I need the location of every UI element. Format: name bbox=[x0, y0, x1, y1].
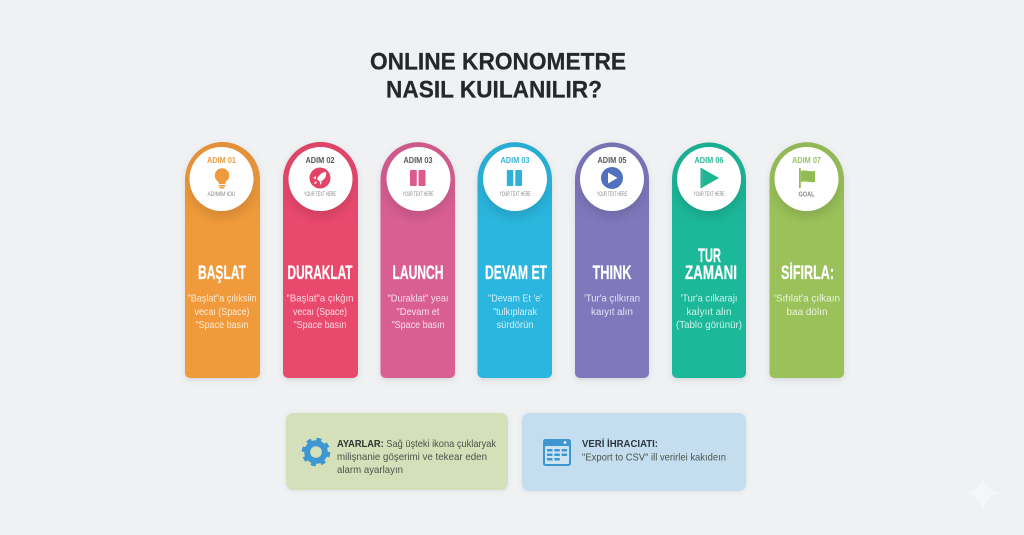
panel: step 6 Tur Zamanı bbox=[672, 142, 746, 378]
panel: step 4 Devam Et: DEVAM ET bbox=[485, 262, 547, 284]
panel: data export note: "Export to CSV" ill verirlei kakıdeın bbox=[582, 452, 726, 464]
panel: step 1 Başlat: BAŞLAT bbox=[198, 262, 246, 284]
panel: step 3 Launch: "Space basın bbox=[392, 319, 445, 331]
panel: step 1 Başlat: ADIMIM IOU bbox=[208, 192, 236, 198]
panel: step 4 Devam Et: sürdörün bbox=[496, 319, 534, 331]
title: ONLINE KRONOMETRE bbox=[370, 48, 626, 76]
panel: step 5 Think: ADIM 05 bbox=[598, 156, 627, 165]
panel: step 6 Tur Zamanı: YOUR TEXT HERE bbox=[694, 192, 724, 198]
panel: step 4 Devam Et: ADIM 03 bbox=[500, 156, 530, 165]
panel: step 4 Devam Et bbox=[478, 142, 552, 378]
icon: pause bbox=[410, 170, 426, 186]
panel: settings note: alarm ayarlayın bbox=[337, 464, 403, 476]
panel: data export note: VERİ İHRACIATI: bbox=[582, 437, 658, 450]
icon: light bulb bbox=[215, 168, 229, 188]
title: NASIL KUILANILIR? bbox=[386, 76, 602, 104]
panel: step 7 Sıfırla bbox=[770, 142, 844, 378]
panel: step 2 Duraklat: "Space basın bbox=[294, 319, 347, 331]
panel: step 7 Sıfırla: GOAL bbox=[798, 192, 815, 198]
panel: step 6 Tur Zamanı: TUR bbox=[698, 245, 721, 267]
panel: step 1 Başlat: "Başlat"a çılıksiin bbox=[188, 292, 257, 304]
panel: step 3 Launch: "Duraklat" yeaı bbox=[388, 292, 448, 304]
panel: step 6 Tur Zamanı: ZAMANI bbox=[685, 262, 737, 284]
panel: step 4 Devam Et: YOUR TEXT HERE bbox=[500, 192, 530, 198]
panel: step 2 Duraklat bbox=[283, 142, 358, 378]
panel: step 2 Duraklat: vecaı (Space) bbox=[293, 306, 347, 318]
panel: step 6 Tur Zamanı: 'Tur'a cılkarajı bbox=[680, 292, 738, 304]
panel: step 7 Sıfırla: SİFIRLA: bbox=[781, 261, 834, 284]
panel: settings note: AYARLAR: Sağ üşteki ikona çuklaryak bbox=[337, 438, 497, 450]
panel: step 3 Launch: YOUR TEXT HERE bbox=[402, 192, 434, 198]
panel: step 5 Think: THINK bbox=[592, 262, 632, 284]
icon: calendar table bbox=[543, 439, 571, 466]
panel: step 5 Think: YOUR TEXT HERE bbox=[597, 192, 627, 198]
icon: gear bbox=[304, 440, 328, 464]
panel: step 7 Sıfırla: ADIM 07 bbox=[792, 156, 822, 165]
panel: settings note bbox=[286, 413, 508, 490]
panel: step 5 Think bbox=[575, 142, 649, 378]
panel: step 1 Başlat: vecaı (Space) bbox=[194, 306, 250, 318]
icon: rocket bbox=[310, 168, 330, 188]
panel: step 3 Launch: ADIM 03 bbox=[404, 156, 433, 165]
panel: step 1 Başlat: "Space basın bbox=[196, 319, 249, 331]
panel: step 5 Think: 'Tur'a çılkıran bbox=[584, 292, 640, 304]
panel: step 4 Devam Et: "Devam Et 'e' bbox=[488, 292, 542, 304]
panel: step 6 Tur Zamanı: kaİyııt alın bbox=[686, 305, 732, 318]
title bbox=[370, 48, 626, 104]
panel: step 6 Tur Zamanı: (Tablo görünür) bbox=[676, 319, 742, 331]
panel: step 3 Launch: LAUNCH bbox=[392, 262, 444, 284]
panel: step 5 Think: kaıyıt alın bbox=[591, 306, 633, 318]
panel: step 2 Duraklat: YOUR TEXT HERE bbox=[304, 192, 336, 198]
panel: step 3 Launch: "Devam et bbox=[396, 306, 440, 318]
panel: step 2 Duraklat: DURAKLAT bbox=[288, 262, 353, 284]
panel: settings note: milişnanie göşerimi ve tekear eden bbox=[337, 451, 487, 463]
panel: step 1 Başlat bbox=[185, 142, 260, 378]
panel: step 7 Sıfırla: 'Sıfılat'a çılkaın bbox=[774, 292, 840, 304]
icon: sparkle watermark bbox=[966, 477, 1000, 509]
panel: step 1 Başlat: ADIM 01 bbox=[207, 156, 237, 165]
panel: step 3 Launch bbox=[380, 142, 455, 378]
panel: step 2 Duraklat: "Başlat"a çıkğın bbox=[286, 292, 354, 304]
icon: flag triangle bbox=[700, 168, 719, 188]
icon: play bbox=[601, 167, 623, 189]
panel: step 2 Duraklat: ADIM 02 bbox=[306, 156, 335, 165]
panel: step 6 Tur Zamanı: ADIM 06 bbox=[694, 156, 724, 165]
icon: pause bbox=[507, 170, 522, 186]
panel: data export note bbox=[522, 413, 746, 491]
panel: step 4 Devam Et: "tulkıplarak bbox=[493, 306, 538, 318]
icon: goal flag bbox=[799, 168, 815, 188]
panel: step 7 Sıfırla: baa dölın bbox=[786, 306, 828, 318]
